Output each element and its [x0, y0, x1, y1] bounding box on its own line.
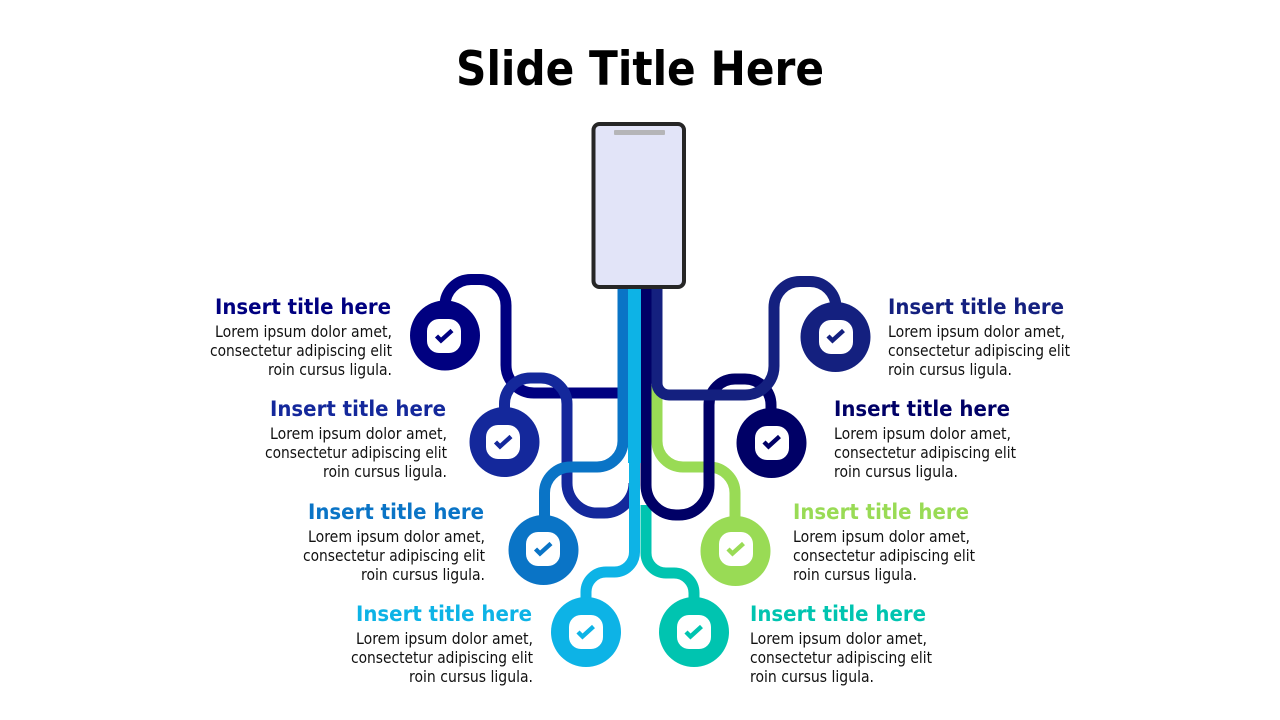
- text block: left 3: Insert title here: [308, 500, 484, 524]
- connector: cyan: [586, 288, 641, 615]
- connector: left indigo: [504, 378, 634, 513]
- text block: right 4: [750, 602, 932, 686]
- text block: right 3: Lorem ipsum dolor amet,: [793, 527, 970, 546]
- text block: right 3: roin cursus ligula.: [793, 565, 917, 584]
- text block: right 3: Insert title here: [793, 500, 969, 524]
- text block: left 2: [265, 397, 447, 481]
- text block: right 2: consectetur adipiscing elit: [834, 443, 1016, 462]
- text block: left 1: Insert title here: [215, 295, 391, 319]
- text block: left 1: roin cursus ligula.: [268, 360, 392, 379]
- device speaker: [614, 130, 665, 135]
- text block: right 4: Lorem ipsum dolor amet,: [750, 629, 927, 648]
- text block: right 1: Insert title here: [888, 295, 1064, 319]
- connectors: [445, 280, 836, 615]
- node: right 4: [659, 597, 729, 667]
- text block: right 4: Insert title here: [750, 602, 926, 626]
- connector: green: [657, 385, 735, 525]
- text block: left 3: roin cursus ligula.: [361, 565, 485, 584]
- text block: right 2: Lorem ipsum dolor amet,: [834, 424, 1011, 443]
- text block: right 3: [793, 500, 975, 584]
- text block: left 1: consectetur adipiscing elit: [210, 341, 392, 360]
- text block: right 1: Lorem ipsum dolor amet,: [888, 322, 1065, 341]
- text block: left 4: [351, 602, 533, 686]
- connector: teal: [646, 505, 694, 615]
- text block: left 2: roin cursus ligula.: [323, 462, 447, 481]
- text block: left 4: consectetur adipiscing elit: [351, 648, 533, 667]
- node: right 2: [736, 408, 806, 478]
- text block: right 1: [888, 295, 1070, 379]
- text block: left 2: consectetur adipiscing elit: [265, 443, 447, 462]
- text block: right 2: roin cursus ligula.: [834, 462, 958, 481]
- connector: left navy: [445, 280, 622, 393]
- device: [594, 124, 684, 287]
- title: Slide Title Here: [456, 42, 824, 97]
- text block: left 4: Insert title here: [356, 602, 532, 626]
- text block: right 4: consectetur adipiscing elit: [750, 648, 932, 667]
- text block: left 4: Lorem ipsum dolor amet,: [356, 629, 533, 648]
- text block: left 4: roin cursus ligula.: [409, 667, 533, 686]
- node: left 2: [470, 407, 540, 477]
- text block: right 4: roin cursus ligula.: [750, 667, 874, 686]
- text block: left 2: Lorem ipsum dolor amet,: [270, 424, 447, 443]
- connector: right navy: [646, 288, 771, 515]
- text block: right 1: roin cursus ligula.: [888, 360, 1012, 379]
- connector: blue: [544, 288, 623, 530]
- text block: right 2: Insert title here: [834, 397, 1010, 421]
- text block: left 1: Lorem ipsum dolor amet,: [215, 322, 392, 341]
- text block: left 3: [303, 500, 485, 584]
- text block: right 2: [834, 397, 1016, 481]
- node: right 3: [700, 516, 770, 586]
- text block: right 1: consectetur adipiscing elit: [888, 341, 1070, 360]
- node: right 1: [800, 302, 870, 372]
- node: left 3: [508, 515, 578, 585]
- text block: right 3: consectetur adipiscing elit: [793, 546, 975, 565]
- text block: left 3: Lorem ipsum dolor amet,: [308, 527, 485, 546]
- text block: left 3: consectetur adipiscing elit: [303, 546, 485, 565]
- connector: right dark blue: [657, 282, 836, 395]
- node: left 1: [410, 300, 480, 370]
- node: left 4: [551, 597, 621, 667]
- text block: left 2: Insert title here: [270, 397, 446, 421]
- text block: left 1: [210, 295, 392, 379]
